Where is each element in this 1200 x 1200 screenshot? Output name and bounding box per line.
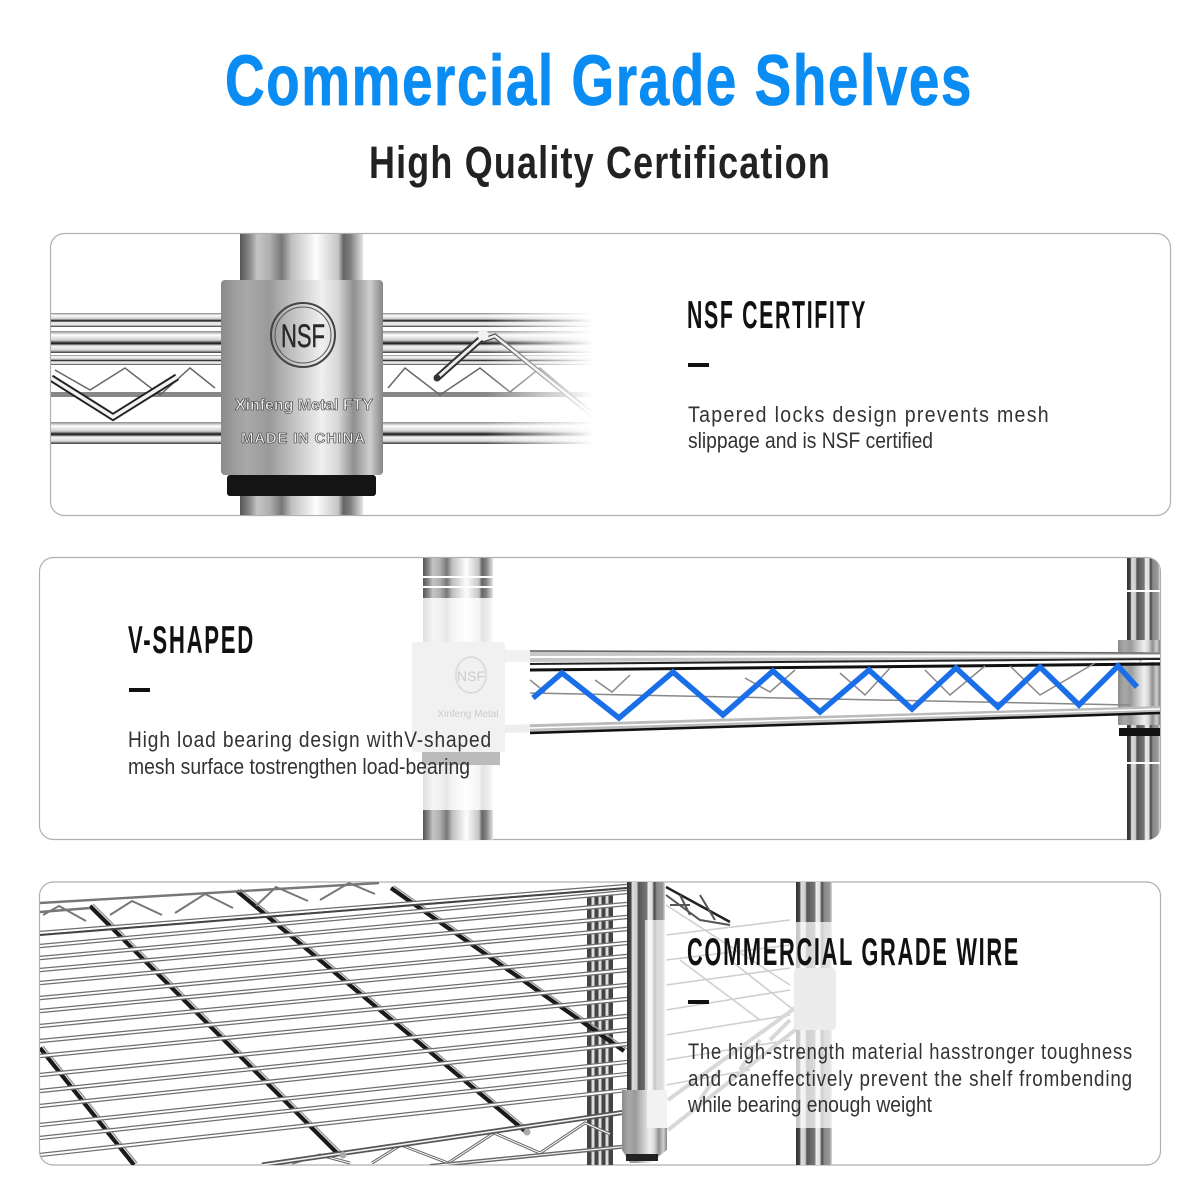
body text: mesh surface tostrengthen load-bearing — [128, 754, 470, 779]
heading: NSF CERTIFITY — [687, 294, 867, 337]
image: NSF post and collar — [51, 233, 613, 517]
body text — [128, 727, 492, 779]
dash — [129, 688, 150, 692]
image: V-shaped shelf side — [412, 558, 1160, 840]
image: wire shelf — [40, 882, 836, 1166]
body text: High load bearing design withV-shaped — [128, 727, 492, 752]
panel: NSF certified — [50, 233, 1170, 517]
body text — [688, 402, 1050, 453]
panel: commercial grade wire — [40, 882, 1160, 1166]
subtitle: High Quality Certification — [369, 137, 831, 188]
image: NSF post and collar: NSF — [281, 318, 325, 354]
dash — [688, 363, 709, 367]
icon: blue V zigzag — [533, 666, 1137, 718]
body text — [687, 1039, 1133, 1117]
body text: slippage and is NSF certified — [688, 428, 933, 453]
body text: Tapered locks design prevents mesh — [688, 402, 1050, 427]
image: V-shaped shelf side: Xinfeng Metal — [437, 709, 499, 720]
body text: and caneffectively prevent the shelf frombending — [688, 1066, 1133, 1091]
dash — [688, 1000, 709, 1004]
heading: V-SHAPED — [128, 619, 255, 662]
image: NSF post and collar: Xinfeng Metal FTY — [235, 397, 373, 414]
title: Commercial Grade Shelves — [225, 42, 973, 121]
image: V-shaped shelf side: NSF — [457, 668, 485, 684]
body text: while bearing enough weight — [687, 1092, 932, 1117]
panel: V-shaped — [40, 558, 1160, 840]
image: NSF post and collar: MADE IN CHINA — [241, 430, 365, 447]
